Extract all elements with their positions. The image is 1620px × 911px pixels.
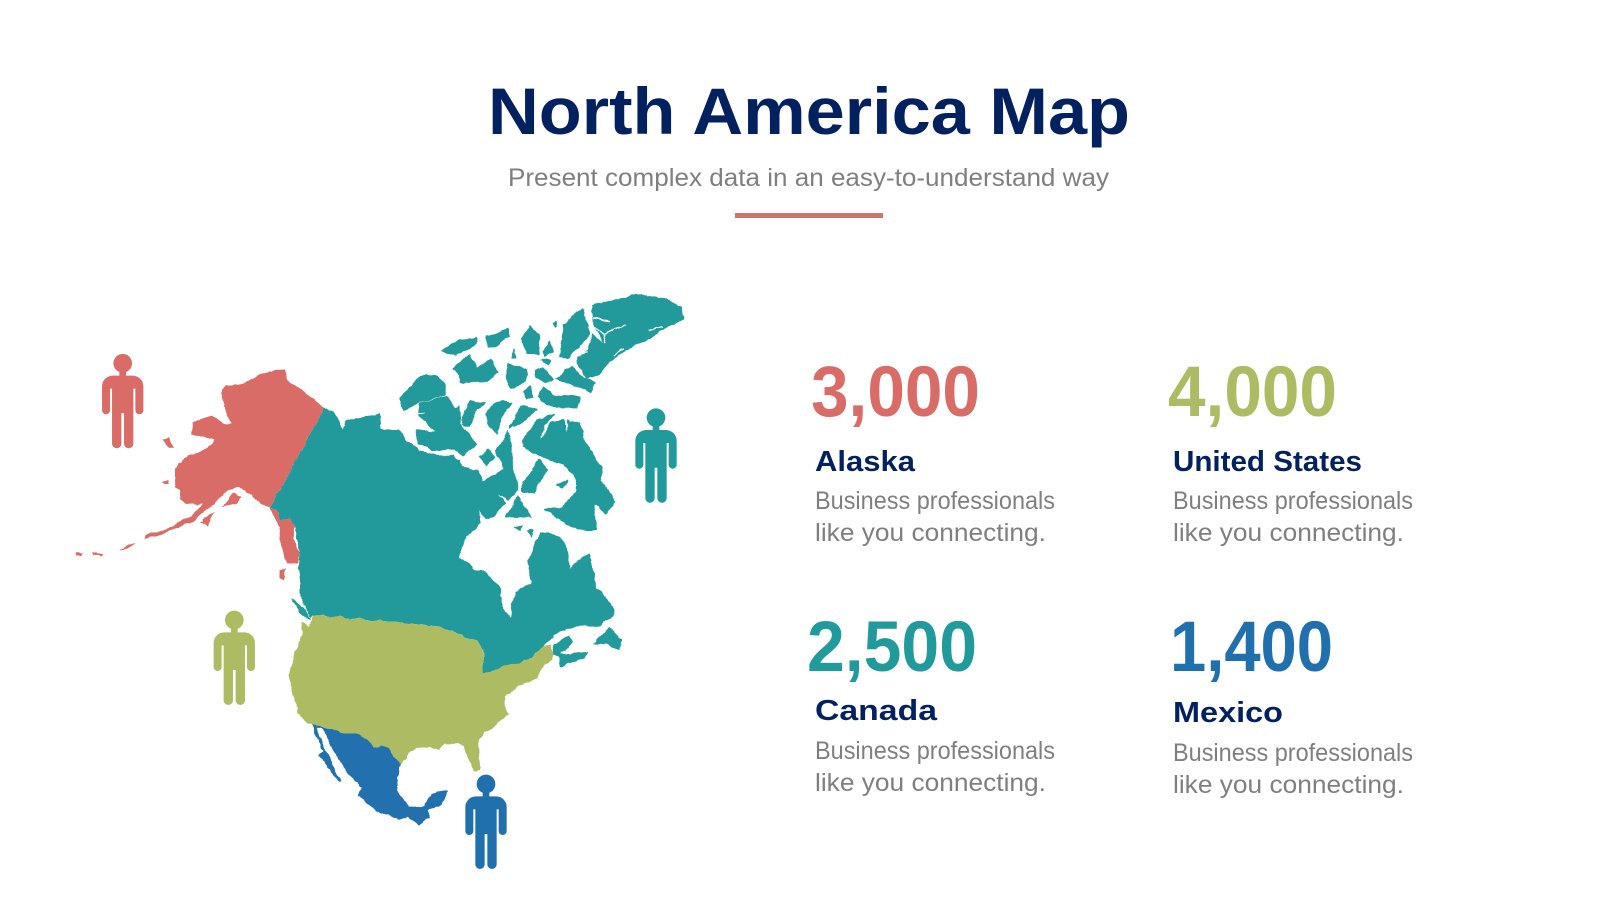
title underline [735,213,883,218]
label: Alaska [815,446,916,478]
description: Business professionals [815,737,1055,765]
description: like you connecting. [815,519,1046,547]
map of North America [75,293,683,825]
description: Business professionals [1173,487,1413,515]
icon: person Alaska [102,354,143,448]
number: 3,000 [811,353,980,432]
number: 2,500 [807,608,977,687]
description: like you connecting. [1173,519,1404,547]
description: like you connecting. [815,769,1046,797]
region: United States [289,614,554,772]
number: 4,000 [1168,353,1337,432]
number: 1,400 [1170,608,1333,687]
icon: person Mexico [465,775,507,869]
stat block: United States [1168,353,1413,547]
icon: person United States [214,611,255,705]
label: Mexico [1173,697,1283,729]
description: like you connecting. [1173,771,1404,799]
region: Mexico [312,725,448,825]
subtitle: Present complex data in an easy-to-understand way [508,164,1110,192]
region: Greenland [577,293,683,378]
stat block: Alaska [811,353,1055,547]
description: Business professionals [815,487,1055,515]
stat block: Canada [807,608,1055,797]
title: North America Map [488,74,1130,148]
label: United States [1173,446,1362,478]
region: Canada [270,308,622,674]
region: Alaska [75,369,324,580]
stat block: Mexico [1170,608,1413,799]
label: Canada [815,695,938,727]
icon: person Canada [635,408,677,503]
description: Business professionals [1173,739,1413,767]
